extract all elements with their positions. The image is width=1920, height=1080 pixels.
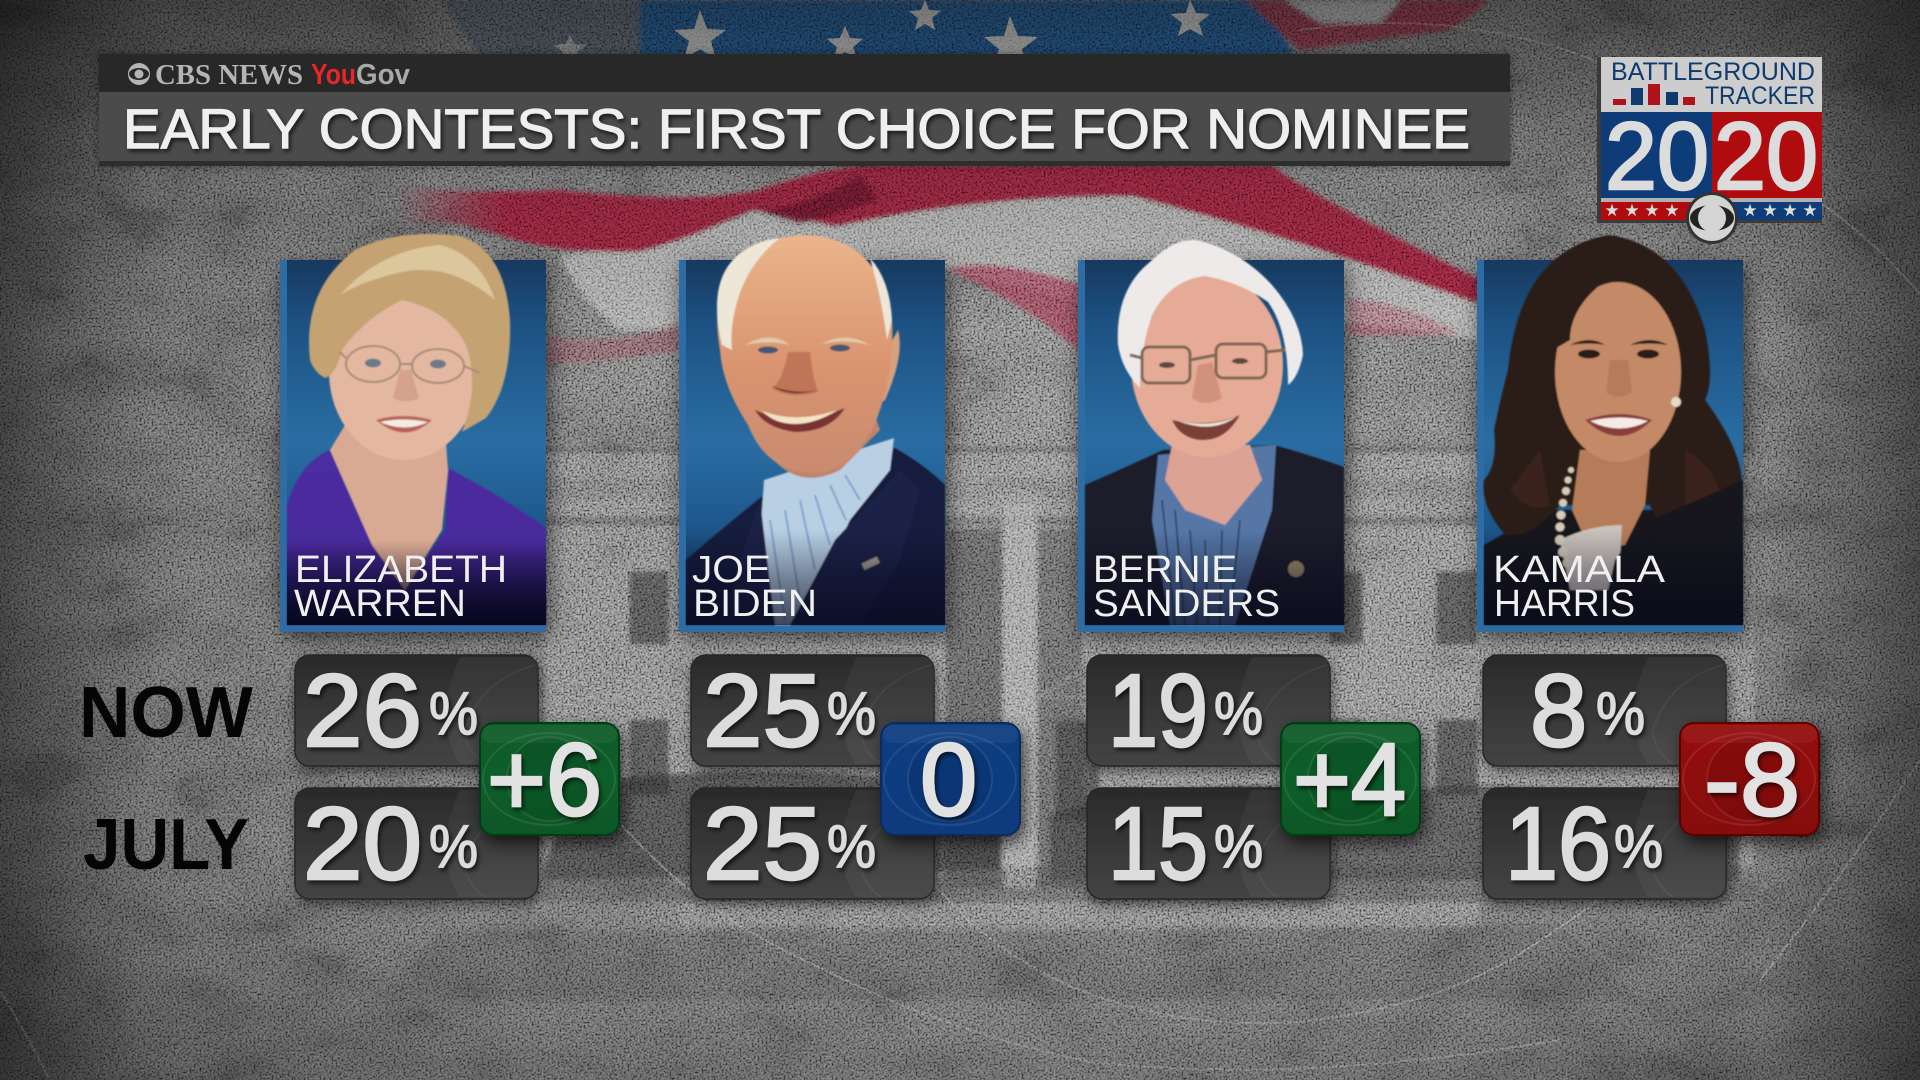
header: title banner xyxy=(99,54,1510,166)
logo: Battleground Tracker 2020: 20 xyxy=(1714,103,1818,210)
Sanders NOW box: 19% xyxy=(1087,653,1330,768)
Biden NOW box: 25%: 25 xyxy=(703,653,822,768)
Biden change badge: 0 xyxy=(881,722,1020,837)
logo: Battleground Tracker 2020: ★ xyxy=(1782,201,1798,220)
Sanders change badge: +4: +4 xyxy=(1293,722,1406,837)
Sanders JULY box: 15%: 15 xyxy=(1108,786,1208,901)
source bar: CBS News YouGov: Gov xyxy=(356,59,410,91)
Warren NOW box: 26% xyxy=(295,653,538,768)
logo: Battleground Tracker 2020: ★ xyxy=(1624,201,1640,220)
name: Bernie Sanders: SANDERS xyxy=(1093,583,1280,625)
portrait: Harris xyxy=(1483,235,1743,625)
name: Joe Biden: JOE xyxy=(692,549,771,591)
logo: Battleground Tracker 2020: ★ xyxy=(1664,201,1680,220)
source bar: CBS News YouGov: CBS NEWS xyxy=(155,59,303,91)
Harris JULY box: 16%: % xyxy=(1614,813,1663,880)
name: Joe Biden xyxy=(692,549,817,625)
logo: Battleground Tracker 2020: ★ xyxy=(1644,201,1660,220)
icon: CBS eye xyxy=(1686,192,1738,244)
candidate card: Kamala Harris xyxy=(1477,235,1743,632)
Biden NOW box: 25%: % xyxy=(827,680,876,747)
logo: Battleground Tracker 2020: ★ xyxy=(1802,201,1818,220)
Sanders NOW box: 19%: 19 xyxy=(1108,653,1208,768)
Biden JULY box: 25%: 25 xyxy=(703,786,822,901)
Warren JULY box: 20%: 20 xyxy=(303,786,422,901)
title: EARLY CONTESTS: FIRST CHOICE FOR NOMINEE xyxy=(123,97,1470,160)
logo: Battleground Tracker 2020: ★ xyxy=(1742,201,1758,220)
logo: Battleground Tracker 2020: ★ xyxy=(1604,201,1620,220)
portrait: Sanders xyxy=(1085,240,1344,625)
Sanders JULY box: 15% xyxy=(1087,786,1330,901)
Warren NOW box: 26%: % xyxy=(429,680,478,747)
Harris change badge: -8: -8 xyxy=(1704,722,1800,837)
Warren JULY box: 20%: % xyxy=(429,813,478,880)
portrait: Biden xyxy=(686,235,945,625)
name: Kamala Harris: KAMALA xyxy=(1493,549,1666,591)
row label: NOW: NOW xyxy=(79,673,253,753)
name: Kamala Harris xyxy=(1493,549,1666,625)
name: Elizabeth Warren: WARREN xyxy=(294,583,466,625)
Biden NOW box: 25% xyxy=(691,653,934,768)
logo: Battleground Tracker 2020: ★ xyxy=(1762,201,1778,220)
logo: Battleground Tracker 2020: BATTLEGROUND xyxy=(1611,58,1815,86)
Sanders NOW box: 19%: % xyxy=(1214,680,1263,747)
Warren NOW box: 26%: 26 xyxy=(303,653,422,768)
source bar: CBS News YouGov: You xyxy=(311,59,356,91)
name: Elizabeth Warren: ELIZABETH xyxy=(295,549,507,591)
Harris NOW box: 8%: % xyxy=(1596,680,1645,747)
Warren change badge: +6: +6 xyxy=(487,722,602,837)
name: Bernie Sanders xyxy=(1093,549,1280,625)
candidate card: Bernie Sanders xyxy=(1078,240,1344,632)
candidate card: Joe Biden xyxy=(679,235,945,632)
Harris change badge: -8 xyxy=(1680,722,1819,837)
Sanders JULY box: 15%: % xyxy=(1214,813,1263,880)
background: White House building xyxy=(380,448,1755,1000)
Harris NOW box: 8% xyxy=(1483,653,1726,768)
Biden change badge: 0: 0 xyxy=(920,722,977,837)
portrait: Warren xyxy=(287,234,546,625)
Harris NOW box: 8%: 8 xyxy=(1530,653,1587,768)
Warren JULY box: 20% xyxy=(295,786,538,901)
name: Elizabeth Warren xyxy=(294,549,507,625)
row label: JULY: JULY xyxy=(83,805,249,885)
logo: Battleground Tracker 2020 xyxy=(1597,57,1822,244)
Harris JULY box: 16% xyxy=(1483,786,1726,901)
Harris JULY box: 16%: 16 xyxy=(1505,786,1611,901)
source bar: CBS News YouGov xyxy=(99,54,1510,92)
Biden JULY box: 25%: % xyxy=(827,813,876,880)
name: Joe Biden: BIDEN xyxy=(693,583,817,625)
candidate card: Elizabeth Warren xyxy=(280,234,546,632)
background: American flag xyxy=(395,0,1490,362)
logo: Battleground Tracker 2020: 20 xyxy=(1605,103,1709,210)
logo: Battleground Tracker 2020: TRACKER xyxy=(1705,82,1815,110)
name: Bernie Sanders: BERNIE xyxy=(1093,549,1237,591)
Biden JULY box: 25% xyxy=(691,786,934,901)
name: Kamala Harris: HARRIS xyxy=(1494,583,1635,625)
